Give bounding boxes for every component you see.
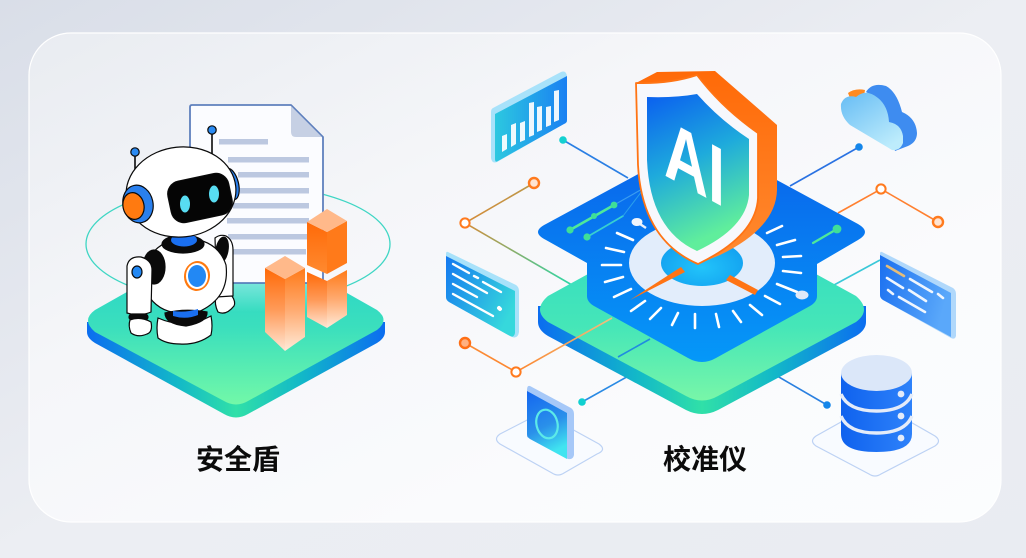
- leg and foot: [157, 309, 212, 344]
- icon: database base plate: [812, 406, 938, 476]
- connector lines behind platform: [465, 140, 938, 405]
- shield face: [647, 94, 749, 251]
- shield rim: [636, 75, 758, 264]
- heading: 安全盾: 安全盾: [196, 444, 280, 475]
- gauge ticks: [602, 226, 801, 328]
- connector lines over green platform: [465, 318, 650, 372]
- gauge markers: [632, 218, 808, 300]
- panel: calibrator illustration: [446, 71, 956, 476]
- eyes: [180, 186, 219, 212]
- panel: safety shield illustration: [86, 105, 390, 418]
- blue gauge plate: [538, 143, 865, 362]
- green sliders: [566, 187, 841, 243]
- orange needles: [630, 267, 758, 300]
- left arm: [127, 250, 165, 336]
- right ear: [220, 167, 242, 201]
- green platform: [538, 215, 866, 414]
- orange bar back: [307, 209, 347, 328]
- left ear: [119, 182, 157, 226]
- antennas: [131, 126, 216, 190]
- shield AI text: AI: [664, 101, 725, 226]
- icon: robot: [119, 126, 242, 344]
- orange bar front: [265, 256, 305, 351]
- icon: database: [841, 355, 912, 452]
- icon: chip base plate: [496, 414, 603, 475]
- teal orbit ellipse: [86, 184, 390, 304]
- face visor: [165, 171, 235, 225]
- icon: chip: [527, 386, 574, 459]
- right arm: [214, 235, 235, 313]
- text card left: [446, 252, 519, 337]
- neck: [162, 234, 204, 253]
- icon: cloud: [841, 85, 917, 151]
- isometric platform: [87, 234, 385, 418]
- chest light: [182, 259, 212, 293]
- shield: [636, 71, 777, 264]
- document: [120, 105, 352, 320]
- gauge dial: [629, 220, 775, 306]
- body: [145, 238, 226, 313]
- text card right: [880, 252, 956, 339]
- connector nodes: [460, 136, 943, 409]
- heading: 校准仪: 校准仪: [663, 444, 747, 475]
- bar chart panel: [491, 72, 567, 162]
- head: [122, 141, 240, 243]
- shield side: [636, 71, 777, 264]
